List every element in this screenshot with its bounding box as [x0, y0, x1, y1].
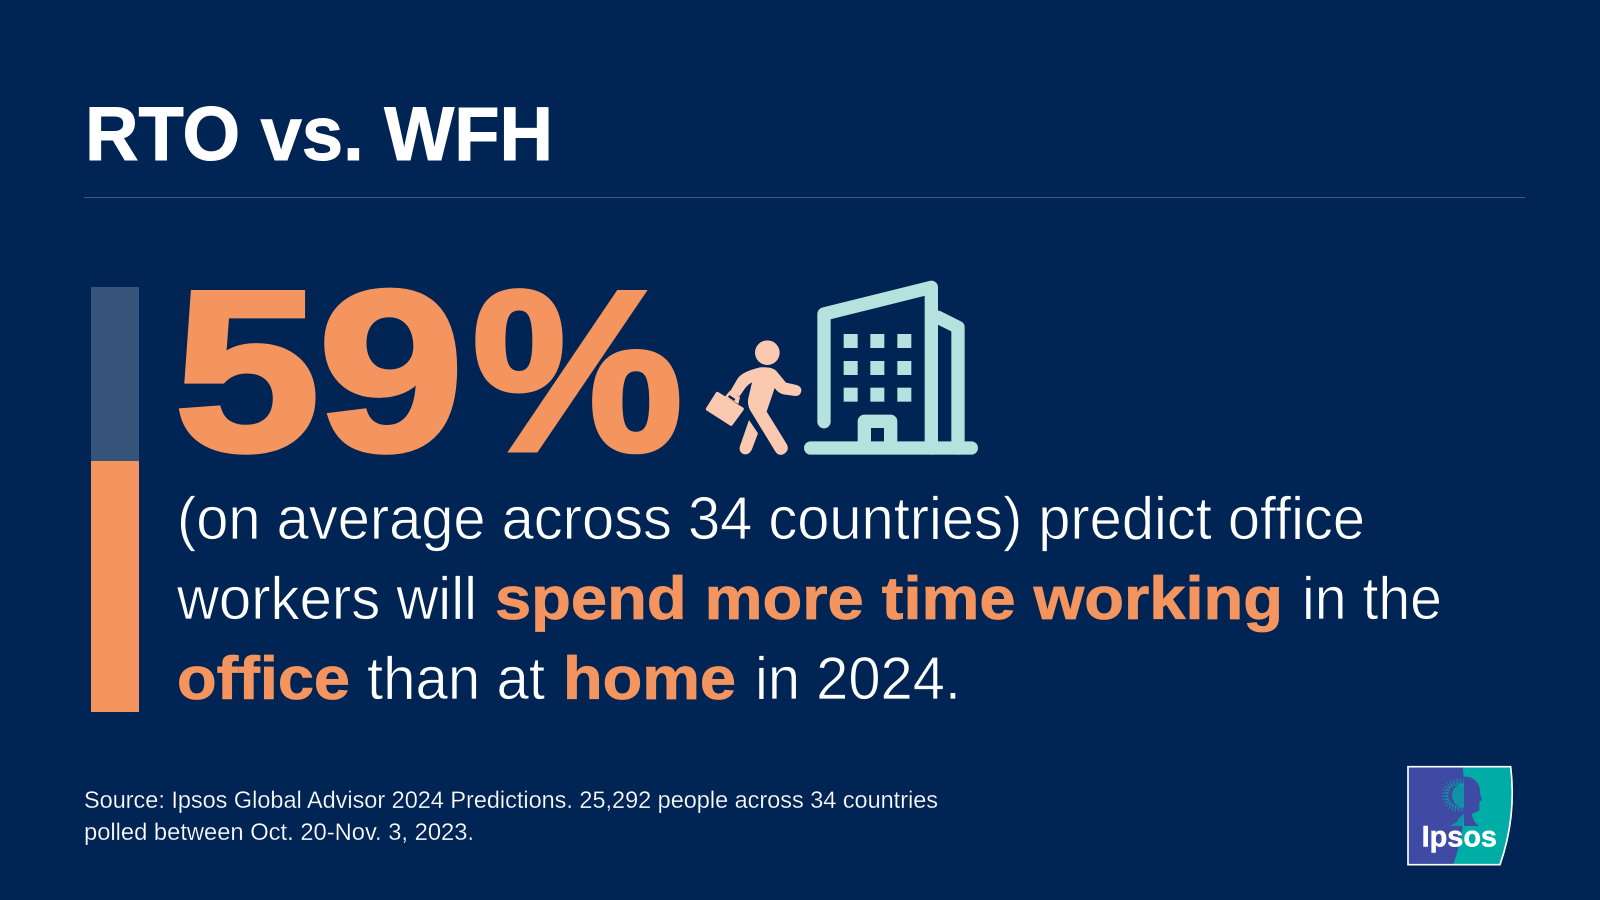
source note: polled between Oct. 20-Nov. 3, 2023.: [84, 819, 474, 846]
source note: Source: Ipsos Global Advisor 2024 Predictions. 25,292 people across 34 countries: [84, 787, 938, 814]
big number: 59%: [174, 243, 683, 499]
body text: [176, 485, 1442, 712]
icon: person walking to office: [708, 287, 971, 455]
title: RTO vs. WFH: [85, 92, 553, 177]
big number: 59%: %: [472, 243, 683, 499]
body text: than at: [367, 645, 545, 712]
big number: 59%: 5: [174, 243, 320, 499]
progress bar: 59 percent: [91, 287, 139, 712]
body text: spend more time working: [495, 565, 1283, 632]
body text: in the: [1302, 565, 1442, 632]
logo: Ipsos: Ipsos: [1422, 821, 1497, 854]
icon: office building: [811, 287, 971, 448]
body text: in 2024.: [755, 645, 961, 712]
body text: (on average across 34 countries) predict office: [177, 485, 1365, 552]
logo: Ipsos: [1408, 767, 1512, 865]
icon: walking person with briefcase: [708, 340, 801, 455]
body text: home: [563, 645, 736, 712]
body text: workers will: [176, 565, 477, 632]
source note: [84, 787, 938, 846]
body text: office: [177, 645, 350, 712]
big number: 59%: 9: [318, 243, 464, 499]
